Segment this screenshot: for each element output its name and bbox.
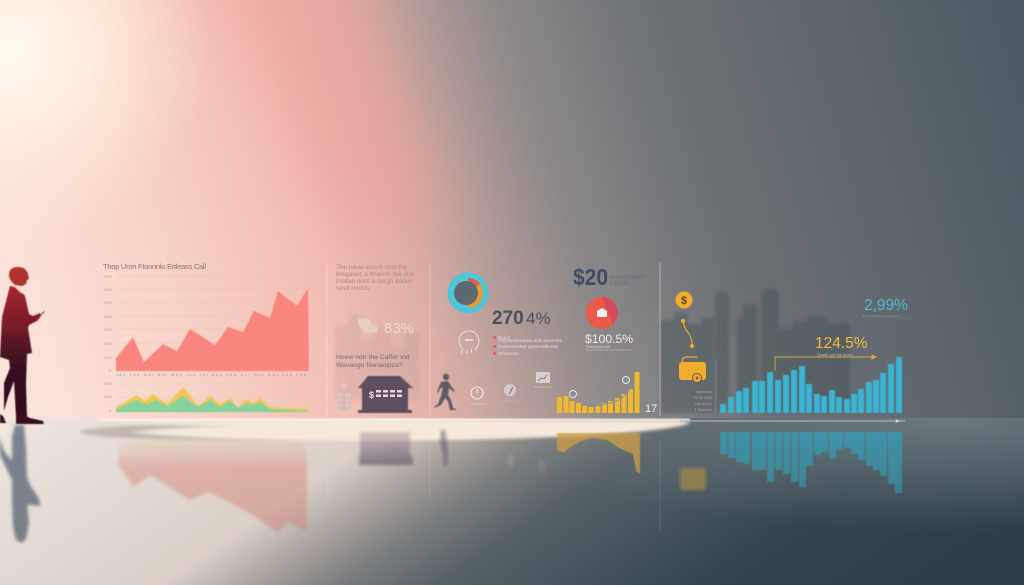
- reflection: divider lines: [327, 440, 660, 530]
- stat 124.5 caption: Growth over the period: [817, 353, 853, 357]
- reflection: blue bars: [720, 432, 902, 493]
- icon: lightbulb outline: [459, 331, 479, 354]
- reflection: yellow area: [125, 441, 300, 451]
- floor light band: [80, 418, 905, 441]
- y axis gridlines and labels: 3000: [104, 328, 112, 332]
- arrow: [775, 355, 876, 371]
- legend text: PLUS 2008: [694, 396, 712, 400]
- stat $20: $20: [573, 264, 608, 290]
- y axis gridlines and labels: 0: [109, 409, 111, 413]
- legend text: Sold goods: [694, 402, 712, 406]
- intro text: bregaooc a hnamet the oral: [336, 271, 414, 278]
- icon: house with dollar panel: [358, 376, 413, 413]
- y axis gridlines and labels: 6000: [104, 288, 112, 292]
- y axis gridlines and labels: 7000: [104, 275, 112, 279]
- y axis gridlines and labels: 1000: [104, 395, 112, 399]
- panel: central statistics: 4%: [526, 309, 551, 328]
- yellow bar chart: [557, 372, 640, 413]
- y axis gridlines and labels: 1000: [104, 356, 112, 360]
- background wall: [0, 0, 1024, 420]
- bullet list: Bxact: [498, 335, 511, 341]
- stat caption: [585, 345, 632, 350]
- red area chart: [116, 288, 309, 371]
- icon: bulb and server: [337, 382, 351, 412]
- panel: central statistics: [434, 264, 657, 415]
- icon: dollar coin: [676, 292, 692, 308]
- phone: [39, 311, 45, 317]
- icon: gauge: [470, 387, 485, 409]
- stat $20 caption: INVESTMENT: [610, 275, 646, 281]
- y axis gridlines and labels: 5000: [104, 301, 112, 305]
- y axis gridlines and labels: 2000: [104, 382, 112, 386]
- reflection: businessman: [0, 425, 41, 543]
- reflection: yellow bars: [557, 433, 640, 474]
- figure: businessman: [0, 267, 45, 424]
- reflection: small icons: [508, 455, 545, 472]
- reflection: walker: [440, 430, 448, 466]
- shoes: [16, 416, 44, 424]
- reflection: yellow vehicle: [680, 468, 706, 490]
- path connector: [681, 319, 694, 348]
- sub heading: Wavaogn Nanaoipza?: [336, 362, 403, 369]
- panel: right statistics: [676, 292, 910, 413]
- icon: red circle with house: [586, 297, 618, 329]
- shirt collar: [15, 285, 22, 294]
- stat caption: Description text: [586, 345, 610, 349]
- icon: yellow vehicle: [679, 357, 706, 382]
- stat 270.4%: 270: [492, 308, 524, 329]
- percent 83: 83%: [384, 320, 414, 337]
- donut chart: [448, 272, 488, 314]
- icon: house with dollar panel: $: [369, 390, 374, 400]
- red chart x labels: Jan Feb Mar Apr May Jun Jul Aug Sep Oct Nov Dec Jan Feb: [116, 373, 306, 377]
- city skyline backdrop: [335, 288, 850, 413]
- floor: [0, 418, 1024, 585]
- suit body: [0, 286, 41, 417]
- reflection: house: [359, 432, 413, 465]
- bullet list: [493, 335, 562, 357]
- legend text: T Solaroon: [694, 408, 712, 412]
- legend text: Tuberosas: [695, 390, 712, 394]
- head: [9, 267, 29, 286]
- trend line: [570, 376, 631, 406]
- reflection: red chart: [118, 444, 307, 533]
- sub heading: Hoew hon the Caffer ınd: [336, 354, 410, 361]
- panel dividers: [327, 263, 716, 416]
- icon: dollar coin: $: [681, 295, 687, 307]
- panel: text and house: [336, 264, 414, 413]
- blue bar chart: [720, 357, 902, 413]
- icon: pie gauge: [503, 384, 518, 406]
- panel: area charts: [103, 262, 309, 413]
- bullet list: TSCRelanedata and uniontvls: [498, 338, 562, 344]
- icon: small chart card: [534, 372, 552, 388]
- stat 2.99%: 2,99%: [864, 297, 908, 314]
- icon: walking person: [434, 374, 456, 410]
- intro text: sevd nortos: [336, 285, 369, 292]
- stat 124.5%: 124.5%: [815, 335, 868, 352]
- number 17: 17: [645, 403, 657, 415]
- y axis gridlines and labels: [104, 275, 308, 413]
- yellow area chart: [116, 387, 308, 412]
- intro text: The Iveax eaoch cost the: [336, 264, 408, 271]
- stat $100.5%: $100.5%: [585, 332, 633, 346]
- chart title: Thop Uron Ftonnnlo Ertleass Call: [103, 262, 206, 271]
- bullet list: Wlsansns: [498, 351, 519, 357]
- stat $20 caption: CALLS: [610, 281, 628, 287]
- y axis gridlines and labels: 4000: [104, 315, 112, 319]
- bullet list: Nsnaeannsar yprsecaltionse: [498, 344, 559, 350]
- intro text: irxatan oorn a oorgn aooos: [336, 278, 412, 285]
- y axis gridlines and labels: 0: [109, 369, 111, 373]
- y axis gridlines and labels: 2000: [104, 342, 112, 346]
- green area chart: [116, 396, 308, 412]
- icon: stacked papers: [358, 318, 378, 333]
- stat 2.99 caption: Benchmark comparison: [862, 314, 899, 318]
